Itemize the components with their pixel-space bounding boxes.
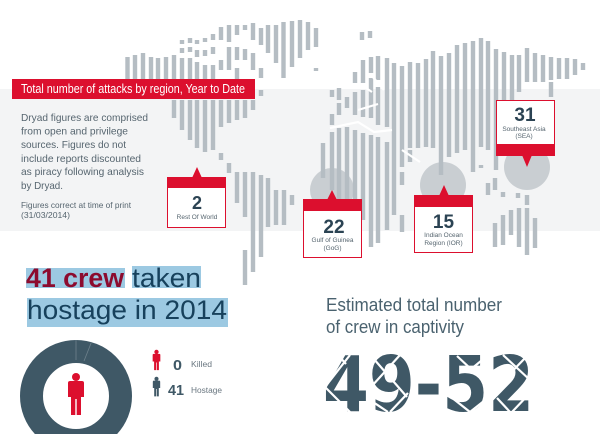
donut chart	[32, 340, 120, 434]
legend: hostage: 41	[168, 382, 184, 399]
Indonesia and Australia	[488, 178, 535, 255]
callout: southeast asia: Southeast Asia	[502, 126, 546, 133]
text block: description: Dryad figures are comprised	[21, 112, 148, 124]
Iceland	[316, 31, 370, 71]
icon: small dark person	[153, 377, 160, 396]
text block: description	[21, 112, 148, 192]
legend: hostage: Hostage	[191, 386, 223, 395]
legend: killed: 0	[173, 357, 182, 374]
heading: estimated crew in captivity: of crew in captivity	[326, 317, 464, 337]
Canadian islands	[182, 23, 268, 60]
callout: gulf of guinea: 22	[323, 217, 345, 238]
Africa	[323, 127, 387, 247]
text block: print date note	[21, 200, 132, 220]
text block: description: as piracy following analysis	[21, 166, 144, 178]
text block: print date note: (31/03/2014)	[21, 210, 70, 220]
icon: small red person	[153, 350, 160, 370]
callout: southeast asia	[496, 100, 555, 167]
text block: description: by Dryad.	[21, 180, 63, 192]
legend: killed: Killed	[191, 360, 212, 369]
callout: indian ocean	[414, 185, 473, 252]
white coastline breaks	[330, 76, 420, 162]
Europe and Asia	[332, 38, 583, 232]
icon: red person	[68, 373, 84, 415]
Greenland	[276, 20, 316, 78]
legend: killed	[153, 350, 212, 374]
heading: crew taken hostage: hostage in 2014	[27, 295, 227, 325]
callout: southeast asia: (SEA)	[515, 133, 533, 140]
North America	[128, 47, 261, 160]
callout: gulf of guinea	[303, 190, 362, 258]
text block: description: include reports discounted	[21, 153, 141, 165]
text block: description: from open and privilege	[21, 126, 128, 138]
callout: rest of world: Rest Of World	[177, 214, 218, 221]
callout: indian ocean: 15	[433, 212, 454, 233]
callout: indian ocean: Indian Ocean	[424, 232, 463, 239]
heading: crew taken hostage: taken	[132, 263, 201, 293]
heading: crew taken hostage: 41 crew	[26, 263, 125, 293]
callout: gulf of guinea: Gulf of Guinea	[312, 237, 354, 244]
text block: print date note: Figures correct at time of print	[21, 200, 132, 210]
legend: hostage	[153, 377, 223, 399]
callout: rest of world: 2	[192, 193, 202, 213]
callout: southeast asia: 31	[514, 105, 536, 126]
circle markers	[310, 144, 550, 212]
title bar	[12, 79, 255, 99]
callout: gulf of guinea: (GoG)	[323, 245, 342, 252]
big stencil number: 49-52	[323, 341, 534, 430]
callout: indian ocean: Region (IOR)	[424, 240, 463, 247]
chart: striped world map	[128, 20, 583, 285]
South America	[229, 163, 292, 285]
heading: estimated crew in captivity	[326, 295, 502, 337]
text block: description: sources. Figures do not	[21, 139, 126, 151]
heading: estimated crew in captivity: Estimated total number	[326, 295, 502, 315]
panel: grey map band	[0, 89, 600, 231]
callout: rest of world	[167, 167, 226, 228]
heading: crew taken hostage	[26, 263, 228, 327]
title bar: Total number of attacks by region, Year to Date	[21, 82, 245, 96]
